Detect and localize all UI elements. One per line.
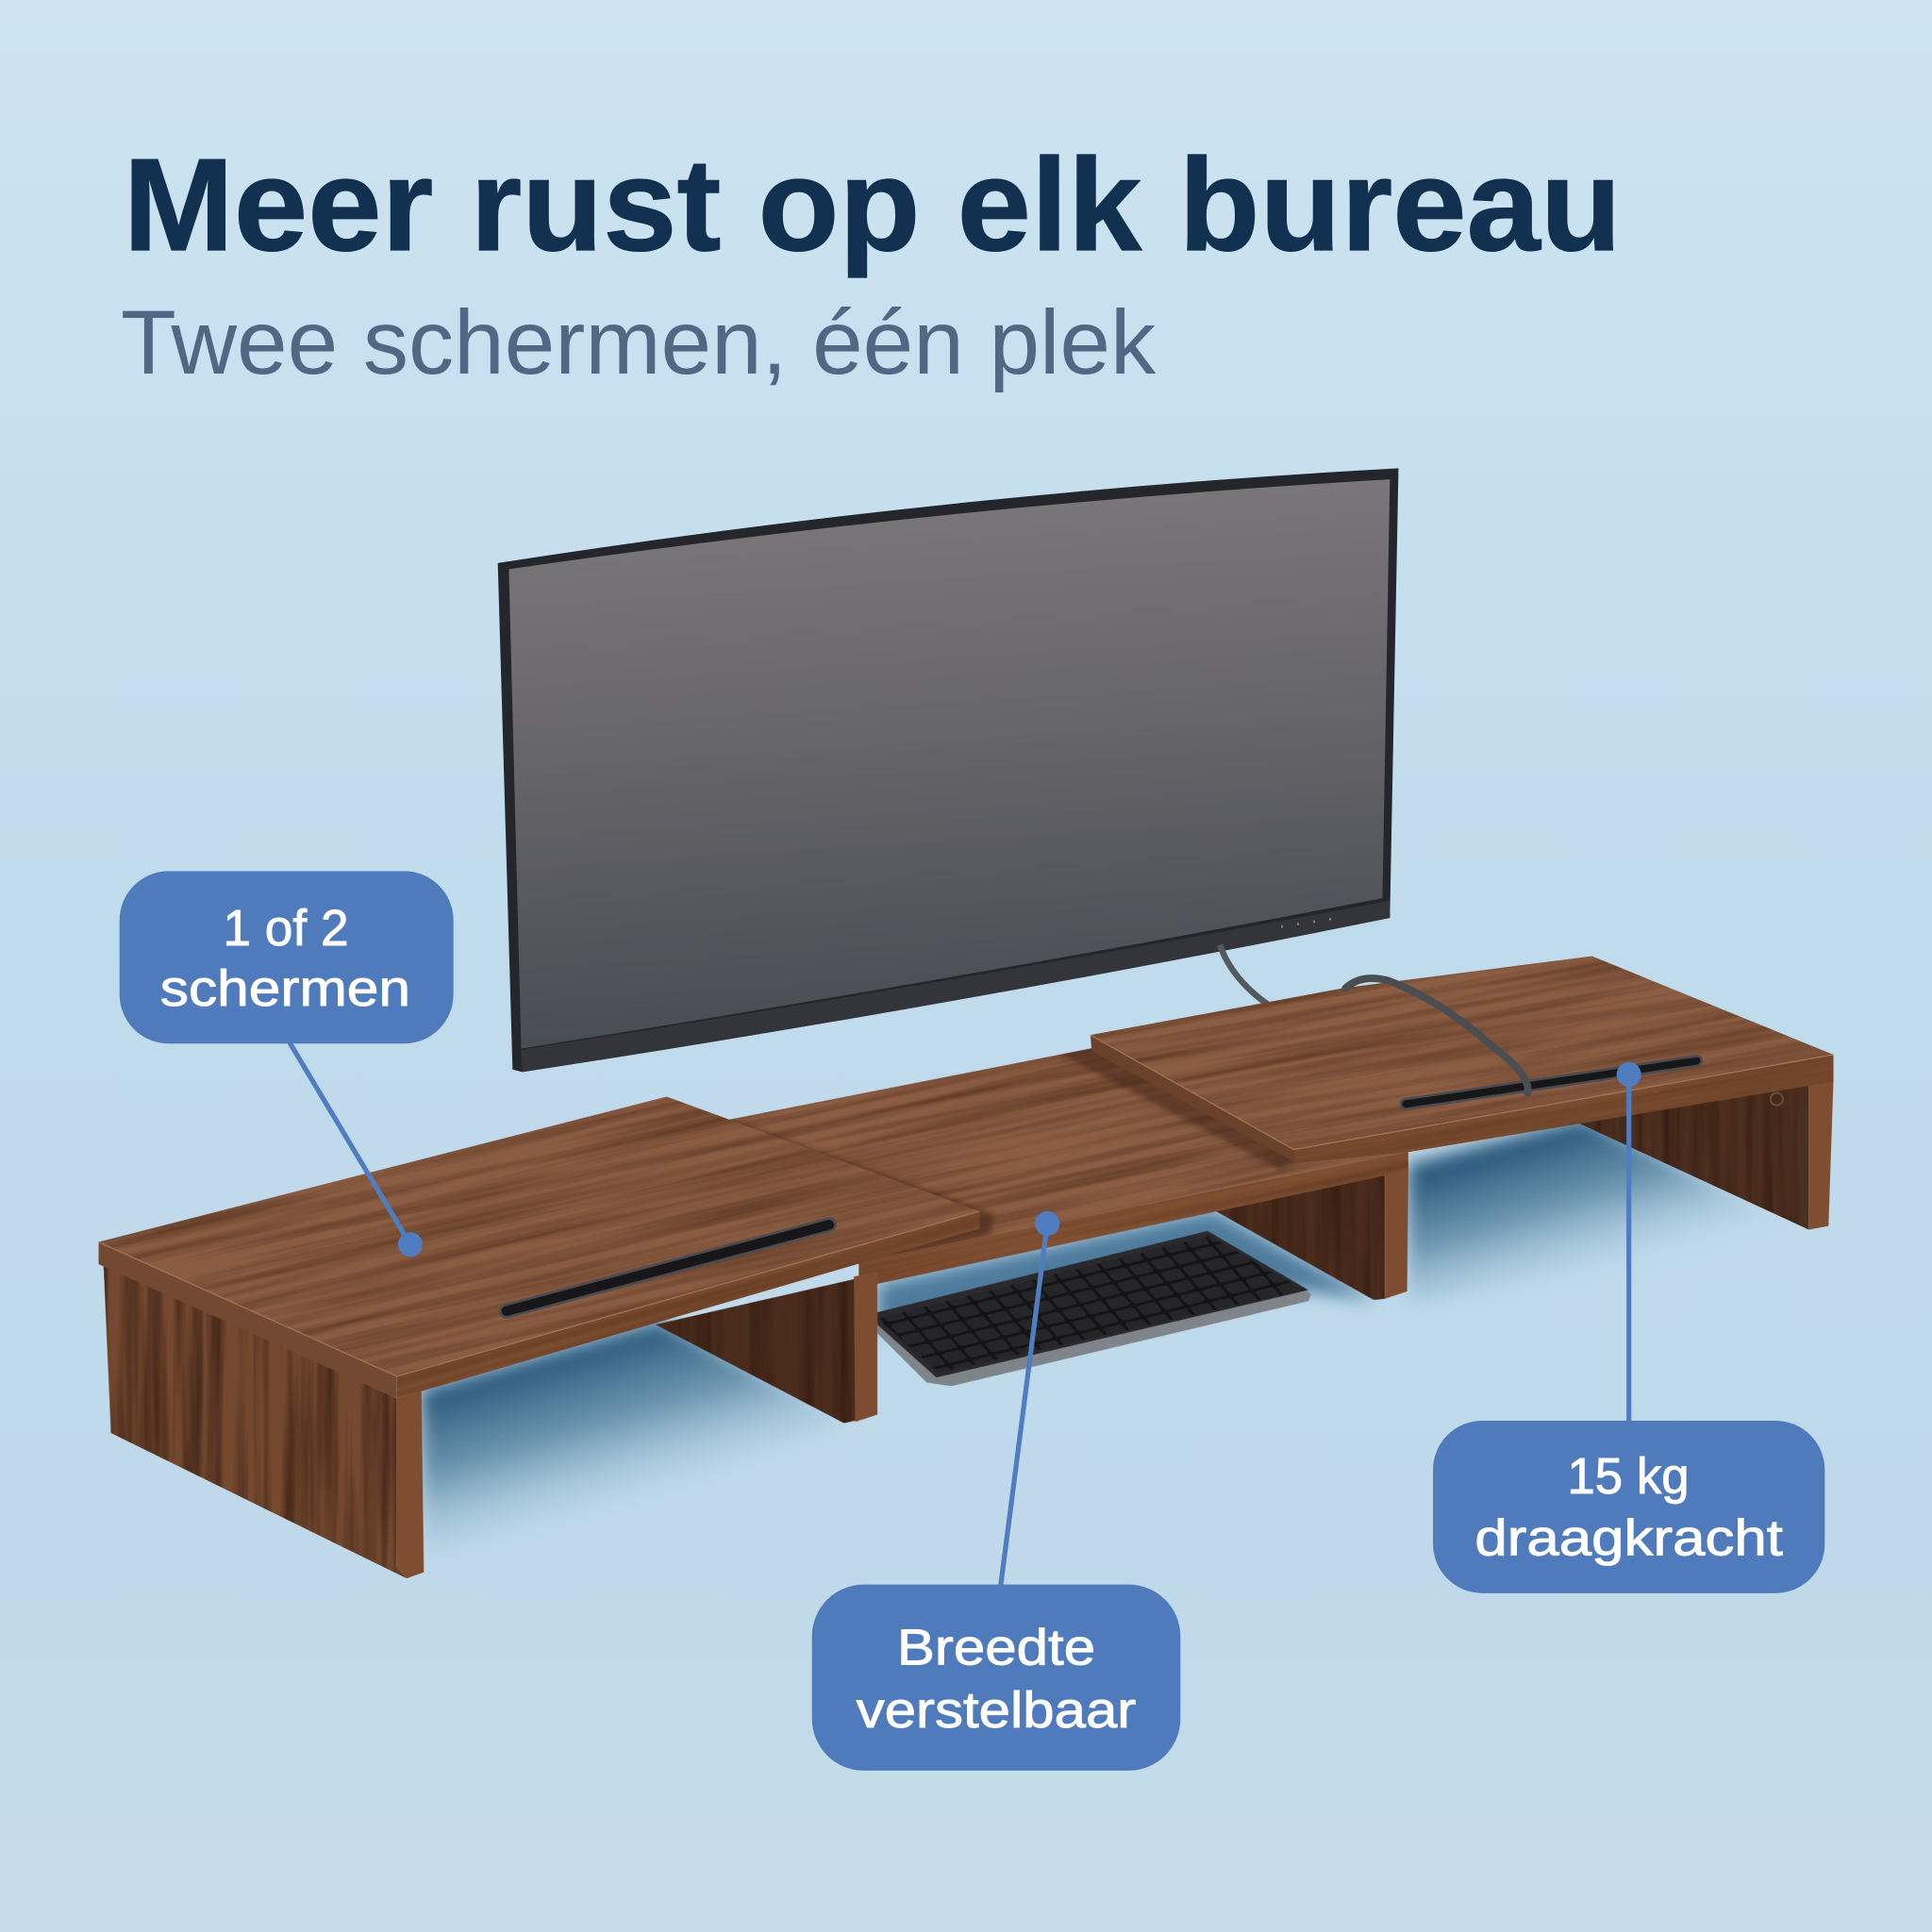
center shelf left leg xyxy=(854,1275,877,1422)
callout: 15 kg draagkracht: draagkracht xyxy=(1474,1510,1783,1566)
title: Meer rust op elk bureau xyxy=(124,130,1622,278)
right shelf module xyxy=(1091,944,1834,1230)
callout: 15 kg draagkracht xyxy=(1433,1062,1824,1593)
right shelf leg front xyxy=(1808,1080,1834,1230)
right shelf front edge xyxy=(1294,1055,1834,1163)
callout: 1 of 2 schermen: 1 of 2 xyxy=(223,901,349,957)
callout: breedte verstelbaar: Breedte xyxy=(897,1621,1095,1676)
right plate edge highlight xyxy=(1091,1035,1834,1150)
left shelf side edge xyxy=(98,1242,397,1398)
callout: 1 of 2 schermen: schermen xyxy=(160,961,410,1017)
left shelf leg front xyxy=(397,1391,424,1578)
callout: breedte verstelbaar xyxy=(812,1211,1180,1771)
right shelf side edge xyxy=(1091,1035,1296,1163)
ground shadows xyxy=(422,1119,1811,1558)
left shelf outer leg xyxy=(98,1257,413,1590)
callout: 1 of 2 schermen xyxy=(120,871,454,1257)
center shelf right leg xyxy=(1208,1168,1408,1306)
right cable slot xyxy=(1406,1061,1697,1104)
cable from monitor xyxy=(1220,945,1269,1006)
center shelf edge xyxy=(858,1152,1408,1285)
left shelf module xyxy=(98,1049,1409,1579)
left plate edge highlight xyxy=(98,1211,979,1376)
right shelf top xyxy=(1091,957,1832,1149)
callout: breedte verstelbaar: verstelbaar xyxy=(857,1683,1136,1739)
power cable xyxy=(1345,978,1528,1093)
keyboard xyxy=(877,1231,1311,1386)
monitor xyxy=(498,468,1398,1072)
center shelf top xyxy=(728,1048,1407,1258)
left cable slot xyxy=(507,1224,829,1311)
center shelf module xyxy=(728,1048,1409,1423)
left shelf front edge xyxy=(396,1212,979,1398)
right shelf inner face xyxy=(1579,1086,1809,1230)
screw xyxy=(1771,1093,1783,1106)
left shelf top xyxy=(99,1096,978,1375)
left shelf inner leg xyxy=(647,1269,877,1429)
subtitle: Twee schermen, één plek xyxy=(121,292,1157,393)
callout: 15 kg draagkracht: 15 kg xyxy=(1567,1449,1690,1505)
